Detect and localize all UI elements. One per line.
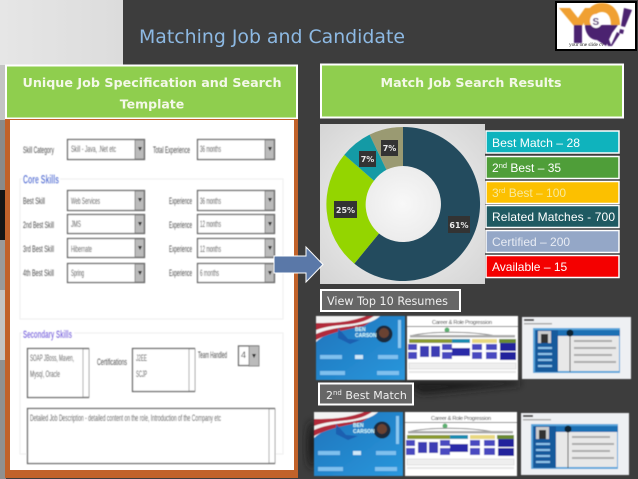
logo speech bubble [590,14,602,28]
logo letter S: S [592,17,600,28]
resume thumbnail: career progression: Career & Role Progression [431,416,491,422]
row: 3rd best skill: Hibernate [71,244,92,254]
row: 2nd best skill: JMS [71,219,81,229]
legend: related matches: Related Matches - 700 [492,210,615,224]
segment 61% [354,127,480,281]
row: 4th best skill: Spring [71,268,84,278]
resume thumbnail: career progression [407,316,518,380]
logo letter Y [559,8,593,34]
certifications box: Certifications [97,357,127,367]
legend: 3rd best: Best – 100 [505,186,566,200]
label teal 7% [359,151,376,167]
label olive 7% [381,140,398,156]
label olive 7%: 7% [383,144,396,153]
label 61%: 61% [449,221,469,230]
resume thumbnails: bottom row [314,412,629,476]
row: 4th best skill: 6 months [200,268,219,278]
row: 3rd best skill: 12 months [200,244,221,254]
skills list box: SOAP JBoss, Maven, [30,353,74,363]
core skills group: Core Skills [23,172,59,186]
row: 2nd best skill: Experience [169,220,192,230]
skills list box: Mysql, Oracle [30,369,60,379]
segment 25% [326,155,379,264]
row: best skill [23,190,274,210]
resume thumbnail: blue profile: BEN [355,327,366,333]
label: 2nd best match: nd [333,389,342,397]
row: best skill: Best Skill [23,196,45,206]
legend: related matches [486,206,619,228]
legend: 2nd best [486,156,619,178]
panel: match results header: Match Job Search Results [380,75,562,90]
resume thumbnail: blue profile: BEN [353,423,364,429]
row: 4th best skill: Experience [169,268,192,278]
row: 2nd best skill: 2nd Best Skill [23,220,54,230]
resume thumbnail: timeline [522,317,631,379]
logo exclamation mark [619,8,632,34]
panel: job specification header: Unique Job Specification and Search [22,75,282,90]
legend: best match: Best Match – 28 [492,136,580,150]
secondary skills group: Secondary Skills [23,329,72,341]
legend: available [486,256,619,278]
label 25% [334,201,357,218]
form row: skill category [23,140,274,160]
panel: job specification header [6,66,297,118]
row: 2nd best skill [23,214,274,234]
logo tagline: your one slide cv [569,42,604,48]
label 25%: 25% [336,206,355,215]
panel: job search form [5,119,298,478]
row: best skill: 36 months [200,196,221,206]
row: 4th best skill: 4th Best Skill [23,268,54,278]
logo letter O ring [584,3,620,25]
job description box [28,408,275,464]
resume thumbnail: career progression [405,412,517,476]
segment olive 7% [370,127,403,170]
label: 2nd best match [319,384,413,404]
legend: 2nd best: nd [499,161,507,170]
logo [556,2,636,50]
logo purple lower band [574,25,618,46]
team handled [198,346,259,366]
label: view top 10 resumes: View Top 10 Resumes [327,294,448,308]
legend: 3rd best: rd [499,186,505,195]
label teal 7%: 7% [361,155,374,164]
segment teal 7% [344,135,386,181]
resume thumbnail: timeline [521,413,629,475]
skills list box [28,348,89,398]
logo letter V [604,32,620,46]
arrow: form to results [274,247,323,282]
core skills group [20,172,283,319]
panel: match results header [321,64,623,118]
legend: 3rd best [486,182,619,204]
label: view top 10 resumes [321,290,460,311]
title: Matching Job and Candidate [139,26,405,48]
job description box: Detailed Job Description - detailed content on the role, Introduction of the Company etc [30,413,221,423]
certifications box: J2EE [136,353,147,363]
legend: best match [486,131,619,153]
legend: certified: Certified – 200 [492,235,570,249]
form row: skill category: Total Experience [153,145,190,155]
row: 3rd best skill: Experience [169,244,192,254]
resume thumbnails: top row [316,316,631,380]
resume thumbnail: blue profile [316,316,405,380]
resume thumbnail: blue profile: CARSON [353,429,375,435]
donut chart [320,124,485,284]
row: best skill: Experience [169,196,192,206]
row: 3rd best skill [23,238,274,258]
certifications box [97,348,195,392]
form row: skill category: 36 months [200,144,221,154]
row: 3rd best skill: 3rd Best Skill [23,244,54,254]
team handled: 4 [241,350,246,360]
form row: skill category: Skill Category [23,145,54,155]
resume thumbnail: blue profile [314,412,403,476]
secondary skills group [20,328,283,464]
row: 4th best skill [23,264,274,282]
form row: skill category: Skill - Java, .Net etc [71,144,116,154]
legend: 2nd best: Best – 35 [507,161,561,175]
label: 2nd best match: Best Match [342,389,407,402]
legend: available: Available – 15 [492,260,567,274]
legend: certified [486,230,619,252]
legend [486,131,619,278]
label: 2nd best match: 2 [326,389,333,402]
team handled: Team Handled [198,350,227,360]
row: best skill: Web Services [71,196,100,206]
panel: job specification header: Template [120,96,184,112]
label 61% [448,216,470,233]
row: 2nd best skill: 12 months [200,219,221,229]
resume thumbnail: blue profile: CARSON [355,333,377,339]
resume thumbnail: career progression: Career & Role Progression [432,320,492,326]
certifications box: SCJP [136,369,147,379]
legend: 2nd best: 2 [492,161,499,175]
legend: 3rd best: 3 [492,186,499,200]
